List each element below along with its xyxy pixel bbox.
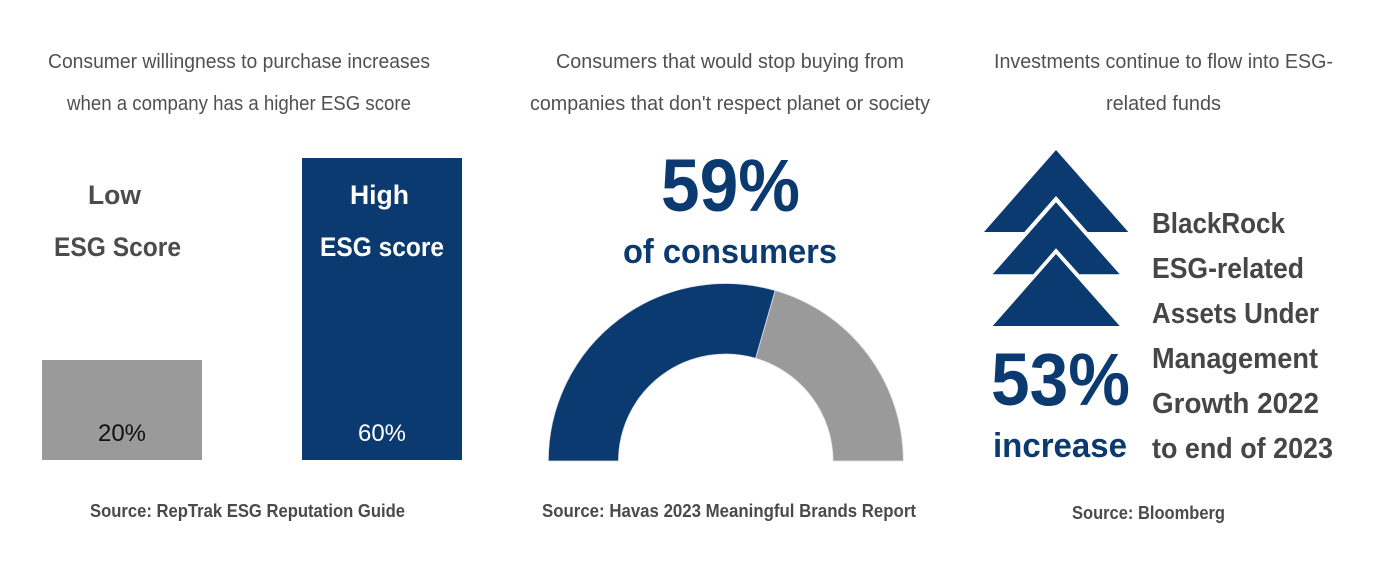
label: high ESG score: ESG score bbox=[320, 232, 444, 262]
stat label: of consumers: of consumers bbox=[623, 233, 837, 271]
label: low ESG score: Low bbox=[88, 180, 142, 210]
text: BlackRock growth description: ESG-related bbox=[1152, 253, 1304, 285]
label: low ESG score bbox=[54, 180, 181, 262]
panel: consumers stop buying gauge bbox=[530, 51, 930, 521]
heading: consumers stop buying: Consumers that would stop buying from bbox=[556, 51, 904, 73]
heading: investments continue: Investments continue to flow into ESG- bbox=[994, 51, 1333, 73]
source: Havas: Source: Havas 2023 Meaningful Brands Report bbox=[542, 501, 916, 521]
bar: high ESG score 60% bbox=[302, 158, 462, 460]
panel: investments into ESG funds bbox=[984, 51, 1333, 523]
text: BlackRock growth description: Management bbox=[1152, 343, 1318, 375]
segment: 59% bbox=[548, 283, 775, 461]
segment: remaining 41% bbox=[756, 290, 903, 461]
bar: high ESG score 60%: 60% bbox=[358, 420, 406, 447]
heading: consumers stop buying bbox=[530, 51, 930, 115]
heading: consumers stop buying: companies that don't respect planet or society bbox=[530, 93, 930, 115]
panel: consumer willingness bar chart bbox=[42, 51, 462, 521]
heading: investments continue bbox=[994, 51, 1333, 115]
heading: consumer willingness bbox=[48, 51, 430, 115]
source: Bloomberg: Source: Bloomberg bbox=[1072, 503, 1225, 523]
source: RepTrak: Source: RepTrak ESG Reputation Guide bbox=[90, 501, 405, 521]
bar: low ESG score 20% bbox=[42, 360, 202, 460]
bar: low ESG score 20%: 20% bbox=[98, 420, 146, 447]
text: BlackRock growth description: Assets Under bbox=[1152, 298, 1319, 330]
label: low ESG score: ESG Score bbox=[54, 232, 181, 262]
label: high ESG score bbox=[320, 180, 444, 262]
heading: consumer willingness: when a company has a higher ESG score bbox=[66, 93, 411, 115]
icon: stacked up arrows bbox=[984, 150, 1128, 326]
text: BlackRock growth description: BlackRock bbox=[1152, 208, 1286, 240]
text: BlackRock growth description: to end of 2023 bbox=[1152, 433, 1333, 465]
label: high ESG score: High bbox=[350, 180, 409, 210]
stat: 59%: 59% bbox=[661, 144, 800, 227]
heading: consumer willingness: Consumer willingness to purchase increases bbox=[48, 51, 430, 73]
stat label: increase: increase bbox=[993, 427, 1127, 465]
stat: 53%: 53% bbox=[991, 338, 1130, 421]
text: BlackRock growth description bbox=[1152, 208, 1333, 465]
text: BlackRock growth description: Growth 2022 bbox=[1152, 388, 1319, 420]
half donut chart bbox=[548, 283, 903, 461]
heading: investments continue: related funds bbox=[1106, 93, 1221, 115]
